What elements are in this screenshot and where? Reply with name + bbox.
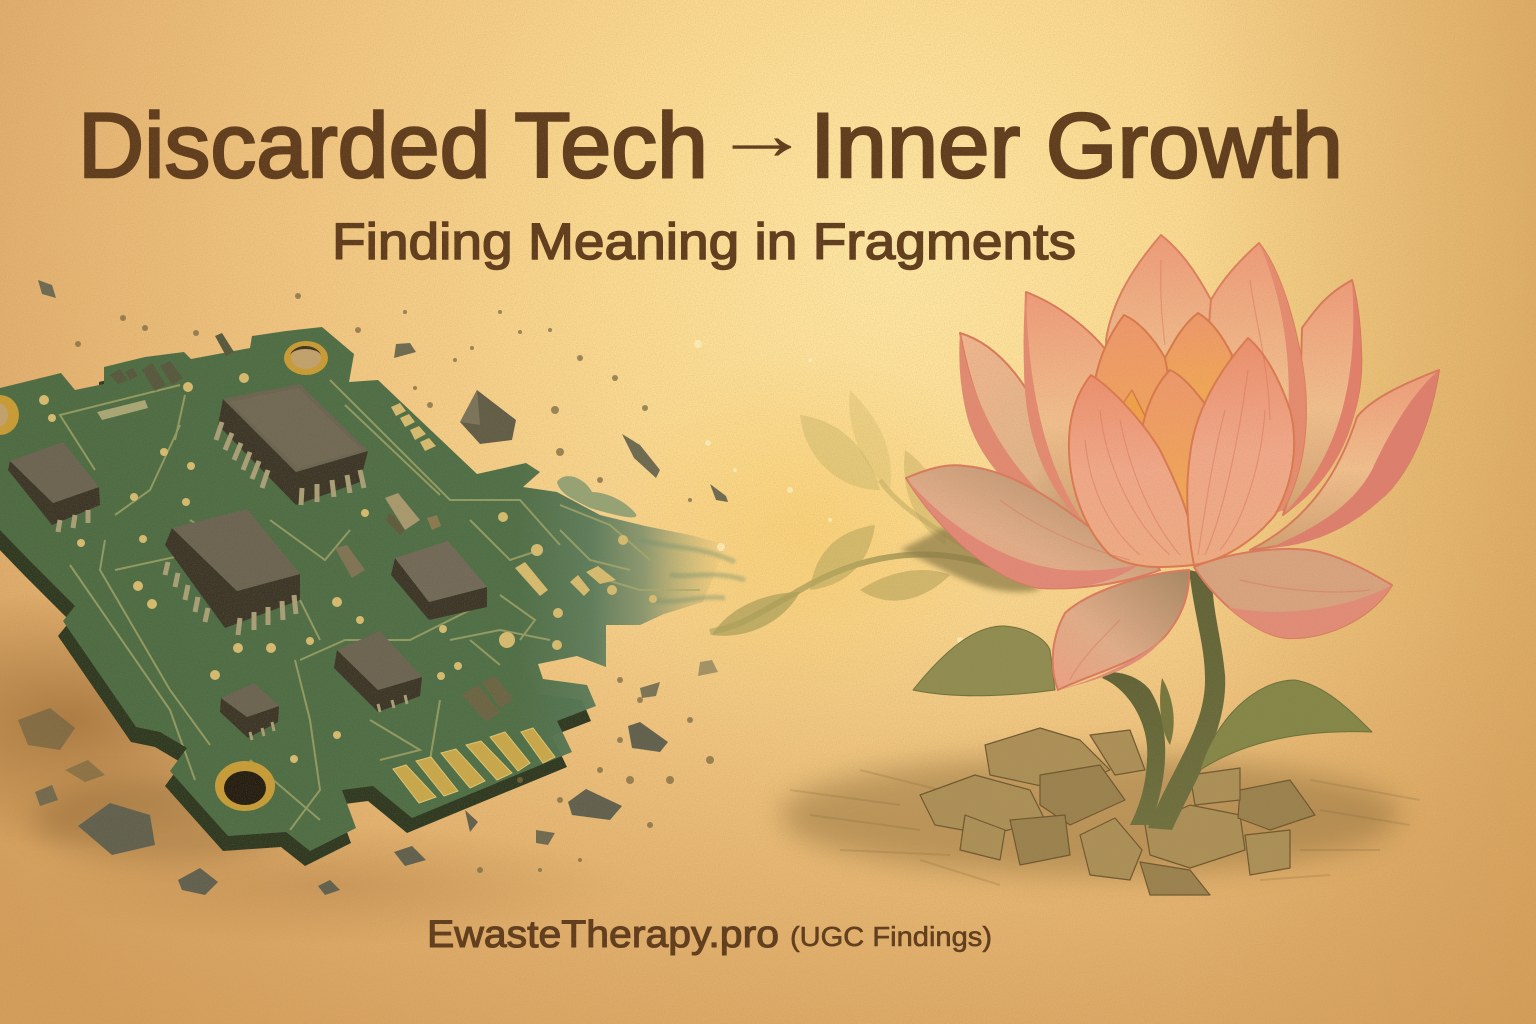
subtitle: Finding Meaning in Fragments xyxy=(332,213,1076,270)
petal: low left xyxy=(906,465,1160,588)
illustration: lotus flower xyxy=(780,235,1439,895)
title xyxy=(78,95,1343,197)
chip: large top xyxy=(216,384,368,505)
title: Discarded Tech xyxy=(78,95,708,197)
solder pads xyxy=(39,373,657,763)
petal: front right xyxy=(1187,338,1294,565)
petal: inner left xyxy=(1095,315,1174,500)
footer credit: (UGC Findings) xyxy=(790,921,992,952)
dust particles xyxy=(75,293,714,873)
leaf: left xyxy=(913,626,1055,696)
petal: inner right xyxy=(1165,313,1232,415)
illustration: fading vine and ghost leaves xyxy=(710,390,1040,636)
petal: inner centre xyxy=(1142,370,1210,540)
chip: left xyxy=(8,442,100,532)
petal veins xyxy=(1000,260,1370,680)
illustration: debris and dust xyxy=(18,280,963,895)
dissolving fragment xyxy=(557,476,636,517)
board surface xyxy=(0,327,727,851)
leaf: right xyxy=(1200,680,1372,770)
chip: square xyxy=(391,541,487,620)
petal: inner small xyxy=(1119,390,1147,450)
petal: left upper xyxy=(1025,292,1106,530)
footer credit: EwasteTherapy.pro xyxy=(427,914,779,956)
chip: large lower xyxy=(165,509,300,635)
petal: far left xyxy=(960,333,1100,540)
petal: far right upper xyxy=(1283,280,1361,515)
soil mound xyxy=(780,728,1420,895)
title: → xyxy=(713,95,811,175)
title: Inner Growth xyxy=(810,95,1343,197)
footer credit xyxy=(427,914,992,956)
circuit traces xyxy=(60,380,700,830)
mounting holes xyxy=(284,341,328,375)
chip: small xyxy=(220,683,279,740)
petal: back left xyxy=(1106,235,1212,480)
glowing motes xyxy=(694,340,963,643)
chip: middle xyxy=(334,631,422,712)
petal: back right xyxy=(1209,243,1306,510)
board shadow and thickness xyxy=(0,380,591,866)
dissolving wisps xyxy=(640,540,745,601)
petal: droop xyxy=(1053,570,1189,690)
petal: front left xyxy=(1069,375,1194,567)
illustration: circuit board xyxy=(0,327,745,866)
small components xyxy=(97,333,234,420)
rock fragments xyxy=(460,390,516,444)
petal: low right xyxy=(1194,549,1392,638)
gold connector fingers xyxy=(393,728,555,803)
petal: far right xyxy=(1250,370,1439,550)
stems xyxy=(1102,672,1165,825)
